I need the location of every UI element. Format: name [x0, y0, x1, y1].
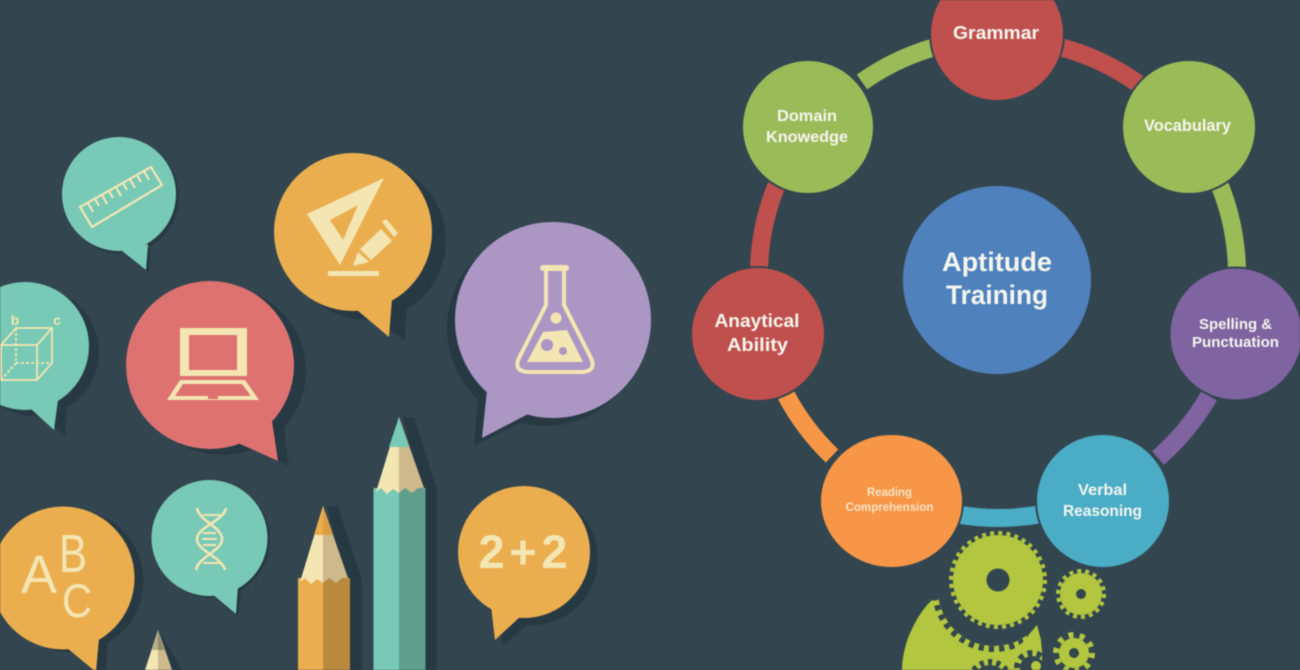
- speech bubble: geometry cube: [0, 282, 99, 436]
- node: Reading Comprehension: [820, 434, 963, 568]
- node: Verbal Reasoning: Reasoning: [1063, 503, 1142, 520]
- speech bubble: set square and pencil: [274, 153, 446, 341]
- centre circle: Aptitude Training: Training: [946, 280, 1048, 310]
- big gear: [951, 533, 1045, 627]
- letters: ABC: A: [21, 545, 57, 605]
- icon: set square and pencil: [307, 178, 398, 276]
- pencil: orange: [298, 506, 362, 670]
- centre circle: Aptitude Training: Aptitude: [942, 247, 1052, 277]
- node: Verbal Reasoning: Verbal: [1078, 482, 1127, 499]
- pencil: teal: [374, 417, 437, 670]
- node: Vocabulary: [1122, 60, 1256, 194]
- icon: laptop: [167, 328, 259, 400]
- node: Verbal Reasoning: [1036, 434, 1170, 568]
- node: Anaytical Ability: [691, 267, 825, 401]
- speech bubble: flask: [447, 222, 651, 446]
- speech bubble: 2+2: [458, 486, 598, 646]
- small gear lower: [1056, 635, 1092, 670]
- icon: cube with labels: b: [11, 312, 19, 328]
- pencil: small beige: [145, 630, 182, 670]
- speech bubble: DNA: [152, 480, 270, 617]
- node: Spelling and Punctuation: Punctuation: [1192, 334, 1279, 351]
- node: Grammar: [930, 0, 1064, 101]
- node: Reading Comprehension: Comprehension: [846, 500, 934, 514]
- icon: cube with labels: [1, 312, 61, 380]
- icon: flask: [517, 265, 593, 372]
- icon: cube with labels: c: [53, 312, 61, 328]
- node: Domain Knowedge: [742, 60, 874, 194]
- node: Domain Knowedge: Domain: [777, 108, 837, 125]
- node: Reading Comprehension: Reading: [867, 485, 912, 499]
- letters: ABC: [21, 524, 92, 627]
- letters: ABC: C: [62, 574, 92, 627]
- node: Anaytical Ability: Ability: [727, 335, 788, 355]
- node: Grammar: Grammar: [953, 23, 1039, 43]
- centre circle: Aptitude Training: [903, 186, 1091, 374]
- node: Anaytical Ability: Anaytical: [714, 311, 800, 331]
- node: Vocabulary: Vocabulary: [1144, 117, 1232, 135]
- icon: DNA helix: [196, 508, 226, 570]
- speech bubble: ABC: [0, 506, 144, 670]
- icon: ruler: [80, 167, 162, 227]
- small gear upper: [1058, 571, 1104, 617]
- node: Spelling and Punctuation: Spelling &: [1199, 316, 1272, 333]
- node: Domain Knowedge: Knowedge: [766, 129, 848, 146]
- node: Spelling and Punctuation: [1170, 268, 1300, 400]
- icon: head silhouette with gears: [902, 531, 1104, 670]
- speech bubble: ruler: [62, 137, 179, 273]
- speech bubble: laptop: [126, 281, 306, 466]
- letters: ABC: B: [59, 524, 87, 584]
- ring connector arcs: [759, 47, 1237, 518]
- text: 2+2: 2+2: [478, 525, 568, 578]
